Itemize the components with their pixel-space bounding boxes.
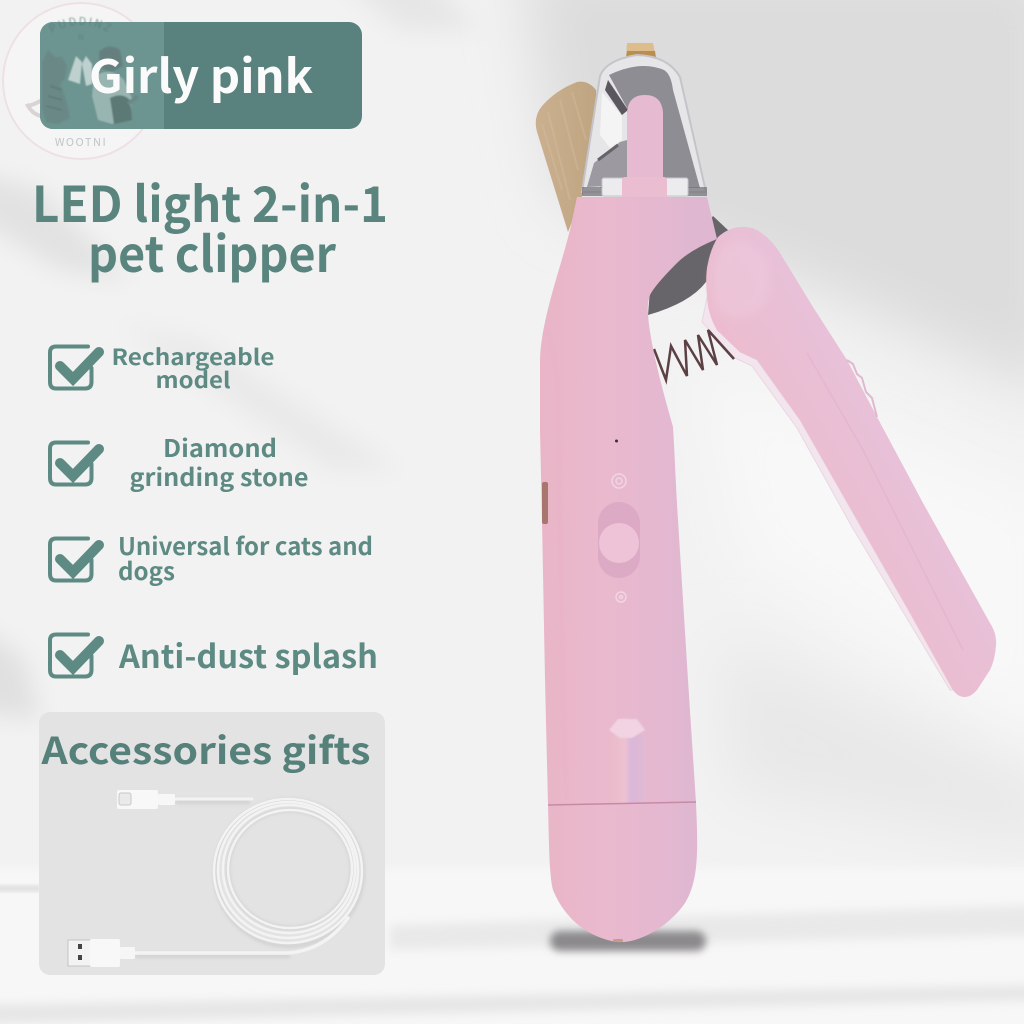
feature text: Universal for cats and xyxy=(118,527,373,562)
pink post xyxy=(627,95,663,177)
metal blade disc xyxy=(648,216,730,315)
icon: check box xyxy=(50,346,99,388)
seam between body and cap xyxy=(548,802,696,805)
feature text xyxy=(118,527,373,587)
feature text: Rechargeable xyxy=(112,340,274,372)
title: LED light 2-in-1 xyxy=(32,166,388,237)
product: pink pet nail clipper xyxy=(536,43,996,942)
panel: accessories gifts xyxy=(39,712,385,975)
tan grinding tip xyxy=(626,43,656,58)
badge: Girly pink xyxy=(40,16,362,129)
icon: grind mode xyxy=(616,592,626,602)
icon: check box xyxy=(50,634,99,676)
title: pet clipper xyxy=(88,216,337,287)
feature: Diamond grinding stone xyxy=(50,429,308,493)
bottom detail xyxy=(613,939,623,942)
body shoulder ridges xyxy=(546,330,566,800)
feature text xyxy=(112,340,274,395)
panel heading: Accessories gifts xyxy=(40,721,370,775)
badge text: Girly pink xyxy=(89,41,313,107)
shadow under the clipper xyxy=(550,931,706,951)
watermark logo xyxy=(3,3,159,159)
wooden grinding file xyxy=(536,82,600,232)
watermark logo: WOOTNI xyxy=(55,134,107,150)
feature text: grinding stone xyxy=(130,458,308,493)
side button xyxy=(542,482,548,524)
indicator dot xyxy=(615,440,618,442)
moving handle xyxy=(702,227,996,697)
feature text: Diamond xyxy=(163,429,277,464)
lower clip bump xyxy=(608,719,645,803)
hinge xyxy=(602,178,688,196)
icon: check box xyxy=(50,442,99,484)
feature: Universal for cats and dogs xyxy=(50,527,373,587)
feature text: model xyxy=(156,363,231,395)
main body xyxy=(540,197,717,942)
feature text: dogs xyxy=(118,552,175,587)
feature: Rechargeable model xyxy=(50,340,274,395)
feature text: Anti-dust splash xyxy=(118,632,378,678)
watermark cats xyxy=(42,16,138,124)
spring xyxy=(654,330,734,380)
icon: USB cable xyxy=(68,790,363,967)
slider switch xyxy=(598,502,640,578)
feature text xyxy=(130,429,308,493)
watermark cats: PUDDINZ xyxy=(50,16,111,32)
icon: light mode xyxy=(612,474,626,488)
title xyxy=(32,166,388,287)
icon: check box xyxy=(50,538,99,580)
watermark cats: N xyxy=(78,32,84,43)
transparent safety cap xyxy=(582,55,707,201)
feature: Anti-dust splash xyxy=(50,632,378,678)
